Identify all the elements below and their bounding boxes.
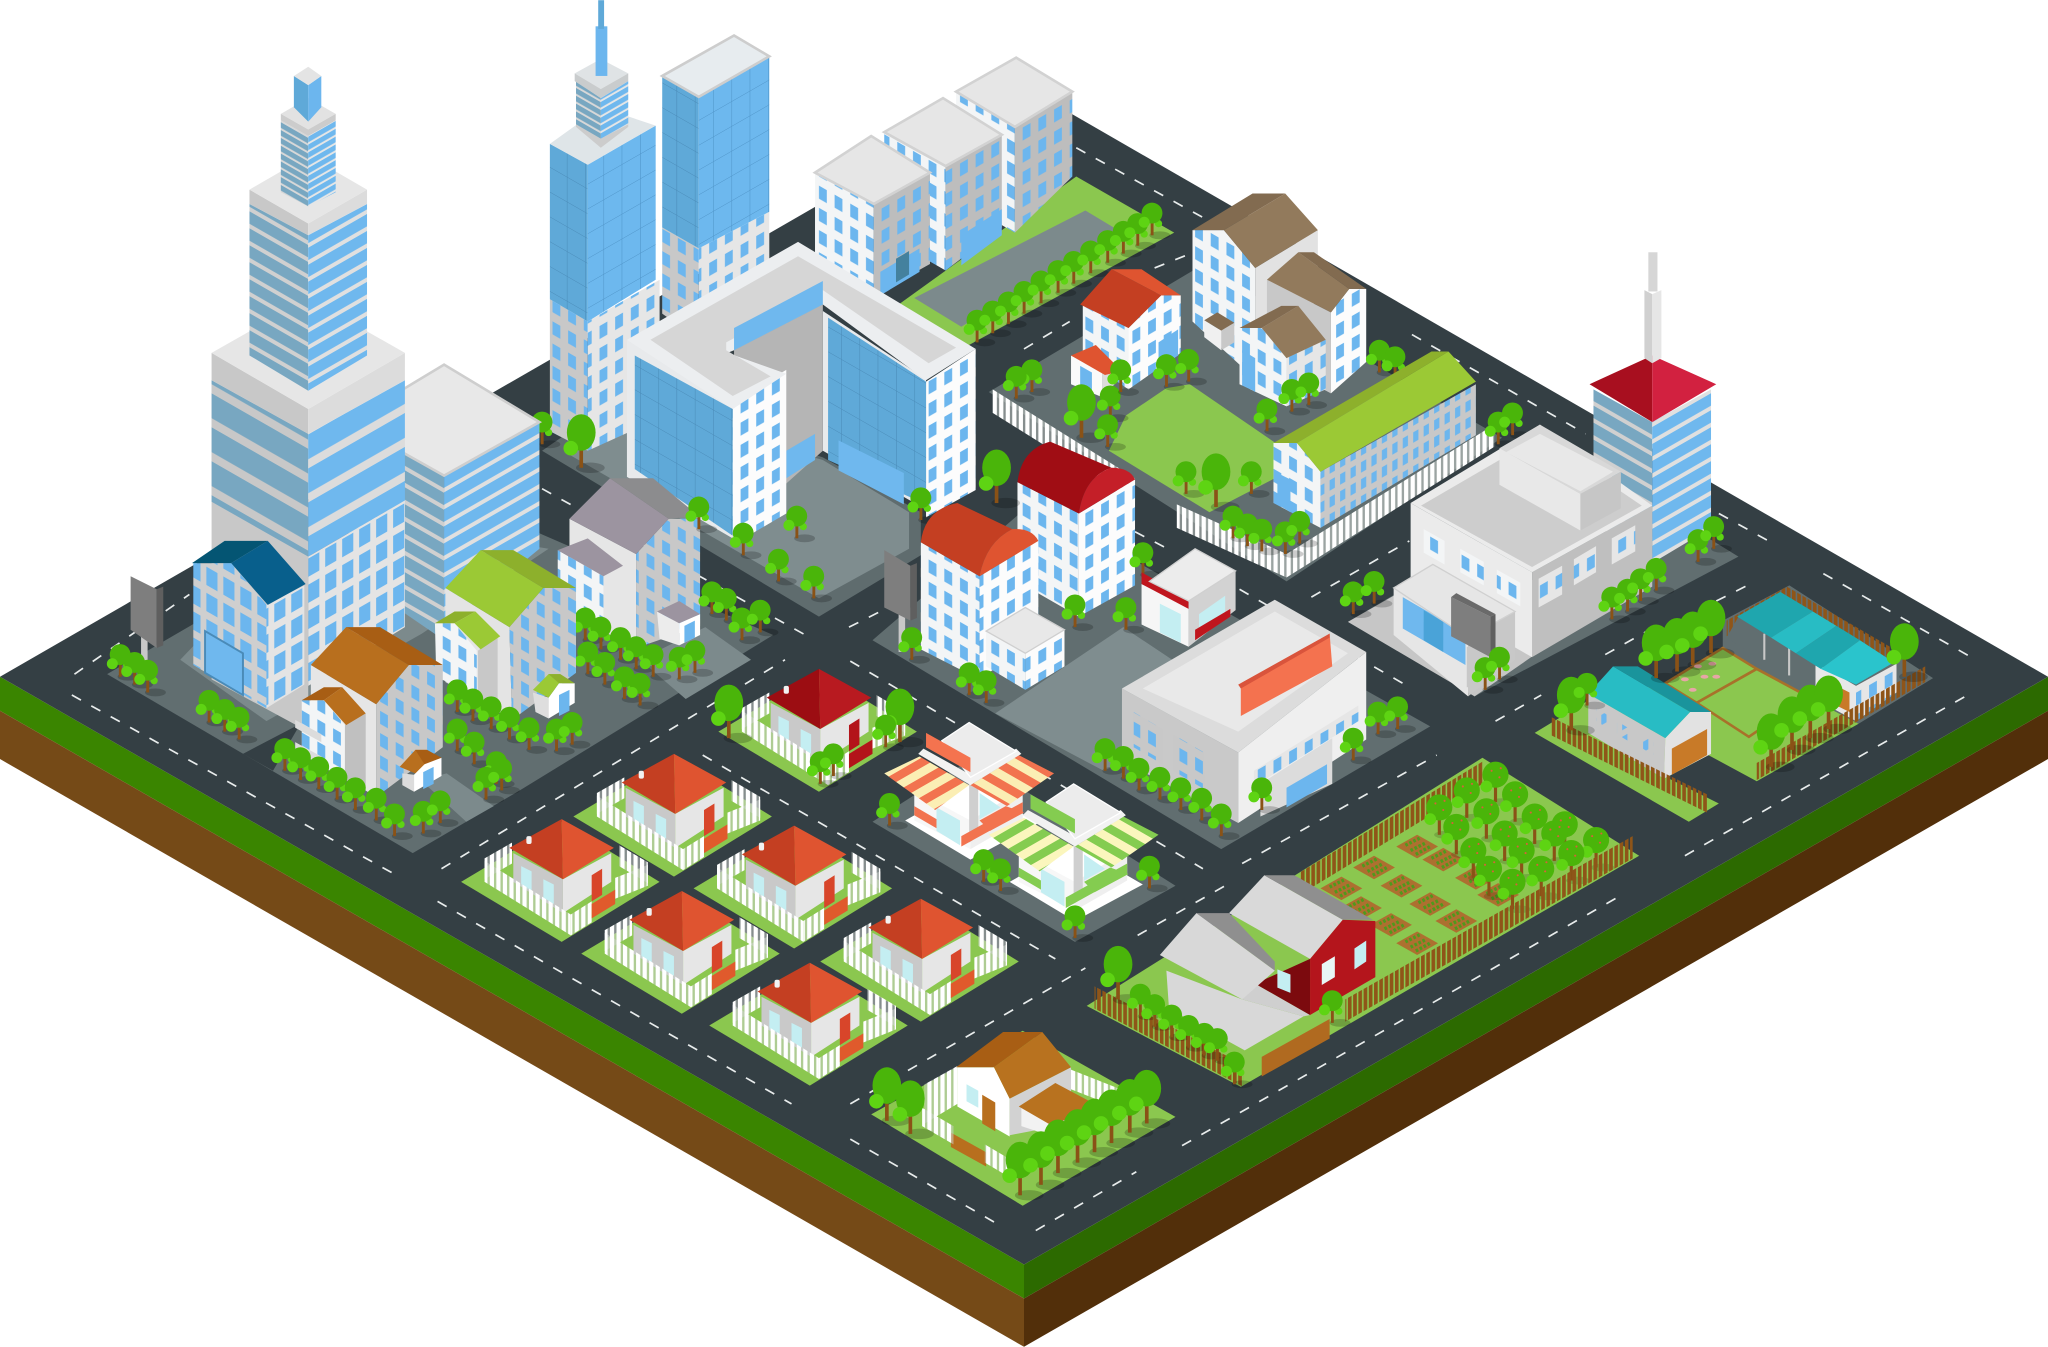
building: rear white block 2 <box>884 98 1002 271</box>
shop: green awning <box>989 784 1159 921</box>
billboard: south central <box>884 550 917 652</box>
ground right side: grass layer <box>1024 677 2048 1298</box>
trees: green house side <box>444 679 590 788</box>
building: blue-roof house <box>192 541 306 708</box>
building: orange-roof house <box>1071 269 1181 397</box>
trees: shops <box>876 793 1168 942</box>
fence: campus west <box>993 389 1135 502</box>
building: orange-roof townhouse <box>295 627 443 797</box>
east farm: fences <box>1552 666 1925 813</box>
lot: shops <box>872 758 1176 942</box>
brown-roof house <box>922 1032 1118 1180</box>
lot: west block <box>107 486 773 853</box>
building: dark-red arched block <box>1017 442 1135 617</box>
left wing <box>627 340 733 538</box>
building: grey-roof house <box>558 478 700 648</box>
building: factory <box>1394 425 1652 696</box>
lot: brown house <box>871 1031 1176 1206</box>
east farm: teal-roof house <box>1588 666 1711 779</box>
roof <box>627 242 976 409</box>
building: rear white block 3 <box>956 58 1072 233</box>
trees: east farm <box>1554 600 1928 772</box>
ground left side: soil layer <box>0 711 1024 1347</box>
building: central U-shaped office <box>627 242 976 545</box>
fence: campus east <box>1287 425 1494 578</box>
road lane markings <box>72 148 1974 1231</box>
tree: behind central building <box>563 414 605 473</box>
building: green-roof long block <box>1273 352 1476 528</box>
building: orange arched block <box>921 503 1038 679</box>
building: tiny tan shed <box>1204 312 1234 350</box>
trees: south central west <box>898 450 1161 707</box>
building: small annex <box>986 608 1064 690</box>
farm fence: southeast side <box>1345 836 1633 1022</box>
trees: factory lot <box>1340 558 1674 694</box>
billboard: west <box>131 576 163 666</box>
building: rear white block 1 <box>815 136 930 295</box>
tree row: north strip <box>964 203 1170 346</box>
building: large tan house <box>1192 194 1318 379</box>
lawn: fenced campus <box>1109 384 1277 512</box>
red house 3 <box>461 819 660 942</box>
building: tallest striped skyscraper <box>212 67 405 732</box>
trees: brown house <box>869 1067 1170 1201</box>
red house 4 <box>694 826 892 948</box>
building: large white block with orange sign <box>1122 600 1366 823</box>
building: twin tower right <box>662 35 769 342</box>
building: small red-trim shop <box>1142 549 1236 647</box>
lot: central plaza <box>542 392 921 617</box>
red house 6 <box>820 899 1019 1022</box>
fence: campus south <box>1177 504 1287 578</box>
right wing <box>926 349 976 517</box>
ground left side: grass layer <box>0 677 1024 1298</box>
shop: orange awning <box>884 722 1054 860</box>
trees: west street row <box>271 738 520 840</box>
red house 7 <box>709 963 908 1086</box>
lot: north green strip <box>899 177 1174 346</box>
trees: barn row <box>1100 946 1351 1088</box>
east farm: teal sheds <box>1727 592 1896 721</box>
red house 2 <box>573 754 772 877</box>
lot: barn farm <box>1087 758 1639 1087</box>
building: tan house right <box>1267 252 1366 393</box>
red house 5 <box>581 891 780 1014</box>
courtyard wall <box>734 305 823 510</box>
building: striped box tower <box>349 365 539 640</box>
trees: campus <box>1003 340 1413 512</box>
lot: factory <box>1348 483 1738 696</box>
trees: west block center <box>572 581 778 709</box>
farm crop beds <box>1320 835 1519 955</box>
lot: east farm <box>1535 585 1933 822</box>
farm orchard <box>1424 762 1614 913</box>
farm fence: southwest side <box>1095 986 1243 1087</box>
trees: big block front row <box>1092 696 1416 840</box>
building: red-roof striped tower <box>1590 252 1716 563</box>
red house: top dark variant <box>718 669 917 792</box>
tree: rear of plaza <box>529 412 560 448</box>
trees: west corner <box>107 644 257 743</box>
billboard: factory <box>1451 593 1496 687</box>
farm fence: northwest side <box>1300 762 1482 895</box>
trees: tower base <box>1685 516 1732 566</box>
trees: top red house <box>711 685 923 788</box>
building: tan house front <box>1240 306 1326 406</box>
east farm: rear fence <box>1727 587 1890 662</box>
east farm: animal pen <box>1665 648 1808 737</box>
building: green-roof house <box>435 550 576 720</box>
ground right side: soil layer <box>1024 711 2048 1347</box>
trees: campus south row <box>1220 402 1531 558</box>
trees: central plaza <box>685 487 939 602</box>
building: twin tower left with spire <box>550 0 660 451</box>
lot: fenced campus <box>989 265 1502 581</box>
lot: south central block <box>872 503 1430 849</box>
barn <box>1160 875 1375 1076</box>
